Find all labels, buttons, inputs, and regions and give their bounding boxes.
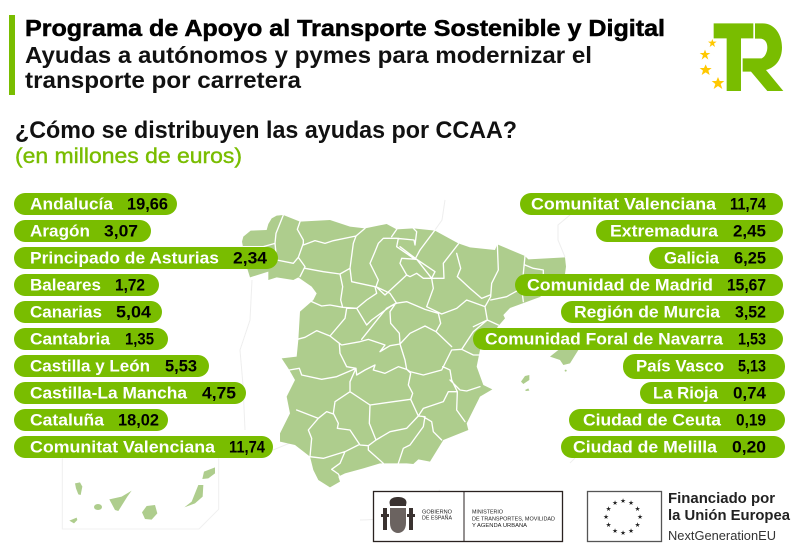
Ciudad de Ceuta: 0,19 [736, 412, 766, 430]
País Vasco: 5,13 [738, 358, 766, 376]
logo: Gobierno de España ministry: MINISTERIO [472, 510, 504, 516]
logo: Gobierno de España ministry: DE TRANSPORTES, MOVILIDAD [472, 516, 555, 522]
logo: Gobierno de España ministry: GOBIERNO [422, 510, 453, 516]
title block: Ayudas a autónomos y pymes para modernizar el [25, 42, 592, 68]
logo: Gobierno de España ministry: DE ESPAÑA [422, 514, 452, 522]
logo: EU flag: ★ [628, 527, 634, 535]
Galicia: 6,25 [734, 250, 766, 268]
logo: EU flag: ★ [606, 521, 612, 529]
País Vasco [623, 354, 785, 379]
left column: region amounts [14, 193, 278, 458]
Baleares: Baleares [30, 276, 101, 294]
logo: EU flag: ★ [612, 499, 618, 507]
title block [25, 15, 665, 93]
funding text: Financiado por [668, 491, 775, 507]
title block: Programa de Apoyo al Transporte Sostenible y Digital [25, 15, 665, 41]
Comunitat Valenciana: 11,74 [730, 196, 767, 214]
Región de Murcia: 3,52 [735, 304, 766, 322]
map of Spain [242, 215, 583, 487]
Canarias: Canarias [30, 304, 102, 322]
Galicia [649, 247, 783, 269]
Castilla-La Mancha [14, 382, 246, 404]
Ciudad de Melilla [561, 436, 785, 458]
funding text: NextGenerationEU [668, 528, 776, 543]
Comunitat Valenciana: Comunitat Valenciana [531, 196, 717, 214]
title block: transporte por carretera [25, 67, 301, 93]
La Rioja [640, 382, 785, 404]
logo: EU flag: ★ [606, 505, 612, 513]
Aragón: Aragón [30, 222, 90, 240]
Baleares: 1,72 [115, 276, 145, 294]
La Rioja: 0,74 [733, 384, 767, 402]
Región de Murcia: Región de Murcia [574, 304, 721, 322]
Canary Islands inset [62, 458, 219, 529]
Castilla y León: 5,53 [165, 358, 197, 376]
Comunidad Foral de Navarra: Comunidad Foral de Navarra [485, 330, 724, 348]
logo: EU flag: ★ [620, 497, 626, 505]
Comunidad de Madrid: 15,67 [727, 276, 766, 294]
logo: Gobierno de España ministry [374, 491, 562, 542]
Principado de Asturias [14, 247, 278, 269]
Comunitat Valenciana: 11,74 [229, 438, 266, 456]
logo: EU flag: ★ [603, 513, 609, 521]
Comunidad de Madrid: Comunidad de Madrid [527, 276, 713, 294]
Extremadura [596, 220, 783, 242]
logo: EU flag: ★ [635, 521, 641, 529]
Canarias [14, 301, 162, 323]
País Vasco: País Vasco [636, 358, 724, 376]
logo: EU flag: ★ [635, 505, 641, 513]
Comunidad de Madrid [515, 274, 783, 296]
Ciudad de Ceuta: Ciudad de Ceuta [583, 412, 722, 430]
Baleares [14, 274, 159, 296]
logo: EU flag: ★ [637, 513, 643, 521]
Comunitat Valenciana [520, 193, 783, 215]
funding text: la Unión Europea [668, 508, 791, 524]
Castilla-La Mancha: 4,75 [202, 384, 236, 402]
Andalucía [14, 193, 177, 215]
Cataluña: 18,02 [118, 412, 159, 430]
Castilla y León: Castilla y León [30, 358, 150, 376]
Canarias: 5,04 [116, 304, 152, 322]
logo: EU flag: ★ [620, 529, 626, 537]
faint neighbouring borders [240, 200, 575, 520]
Extremadura: Extremadura [610, 222, 719, 240]
logo: EU flag: ★ [628, 499, 634, 507]
Ciudad de Melilla: Ciudad de Melilla [573, 438, 718, 456]
Comunitat Valenciana [14, 436, 273, 458]
Comunitat Valenciana: Comunitat Valenciana [30, 438, 216, 456]
Castilla-La Mancha: Castilla-La Mancha [30, 384, 188, 402]
Aragón: 3,07 [104, 222, 138, 240]
Principado de Asturias: Principado de Asturias [30, 250, 219, 268]
Ciudad de Melilla: 0,20 [732, 438, 766, 456]
Aragón [14, 220, 151, 242]
La Rioja: La Rioja [653, 384, 719, 402]
logo: Gobierno de España ministry: Y AGENDA URBANA [472, 523, 527, 529]
right column: region amounts [473, 193, 785, 458]
logo: EU flag [588, 492, 662, 542]
Andalucía: 19,66 [127, 196, 168, 214]
logo: TR with stars [700, 23, 783, 91]
Cataluña [14, 409, 168, 431]
Andalucía: Andalucía [30, 196, 114, 214]
Comunidad Foral de Navarra [473, 328, 783, 350]
Cantabria: Cantabria [30, 330, 111, 348]
heading: ¿Cómo se distribuyen las ayudas por CCAA? [15, 117, 517, 144]
Extremadura: 2,45 [733, 222, 766, 240]
Galicia: Galicia [664, 250, 720, 268]
Principado de Asturias: 2,34 [233, 250, 268, 268]
funding text [668, 491, 791, 543]
Castilla y León [14, 355, 209, 377]
Cantabria: 1,35 [125, 330, 154, 348]
Ciudad de Ceuta [569, 409, 785, 431]
title accent bar [9, 15, 15, 95]
subheading: (en millones de euros) [15, 145, 242, 168]
Cataluña: Cataluña [30, 412, 105, 430]
icon: coat of arms [381, 497, 415, 533]
logo: EU flag: ★ [612, 527, 618, 535]
Región de Murcia [561, 301, 784, 323]
Comunidad Foral de Navarra: 1,53 [738, 330, 766, 348]
Cantabria [14, 328, 168, 350]
